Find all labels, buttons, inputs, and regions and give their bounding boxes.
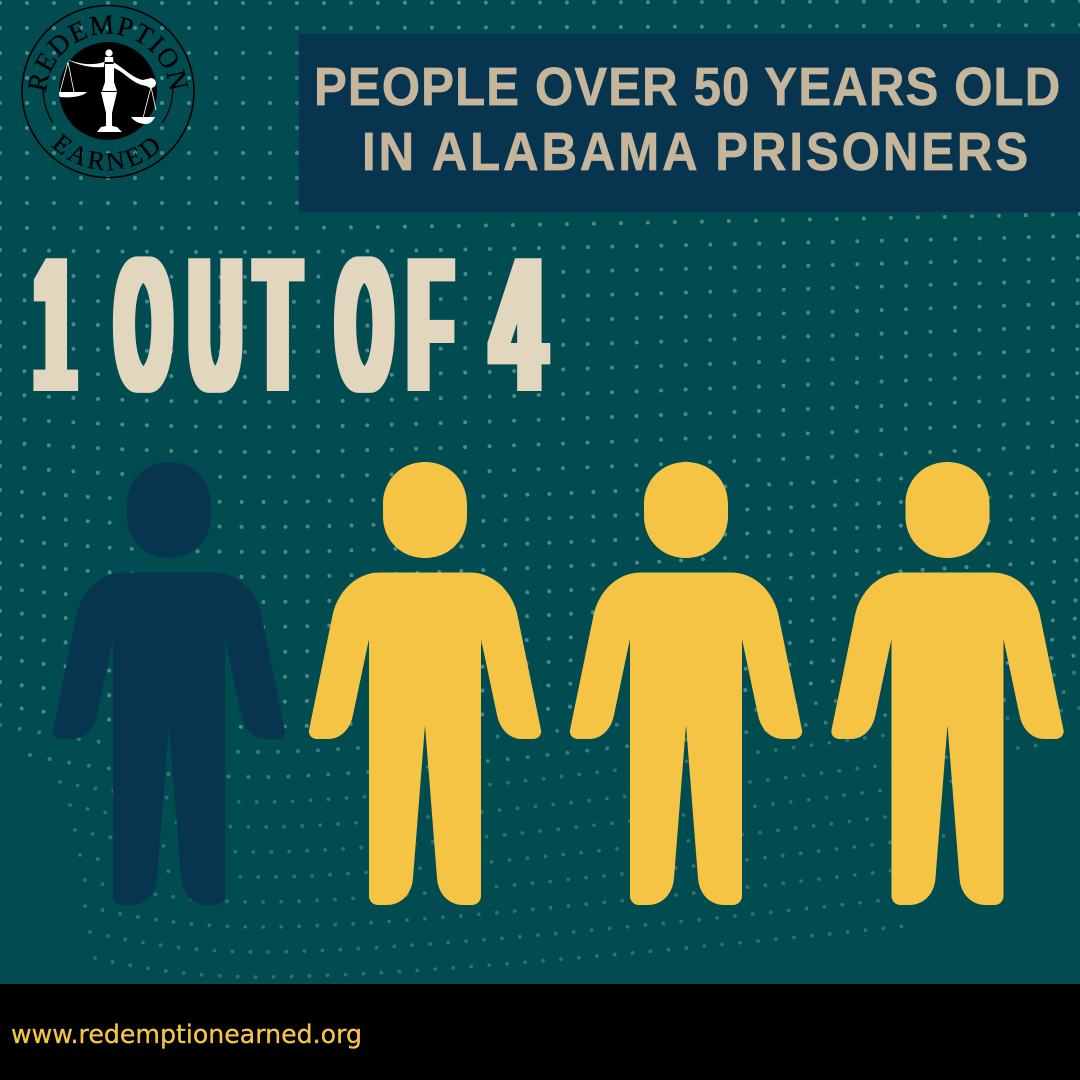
person: highlighted navy xyxy=(53,462,285,905)
pictogram: 1 of 4 people xyxy=(53,462,1064,905)
icon: scales of justice xyxy=(59,49,156,132)
person: yellow 3 xyxy=(831,462,1064,905)
title line 1: PEOPLE OVER 50 YEARS OLD xyxy=(314,56,1060,117)
headline: 1 out of 4: 1 OUT OF xyxy=(35,219,452,431)
person: yellow 1 xyxy=(309,462,541,905)
logo ring text: Earned: EARNED xyxy=(51,133,159,171)
logo side arcs xyxy=(43,87,173,123)
title line 2: IN ALABAMA PRISONERS xyxy=(362,121,1028,182)
person: yellow 2 xyxy=(570,462,802,905)
logo: Redemption Earned seal xyxy=(21,4,195,178)
headline: 1 out of 4: 4 xyxy=(492,218,545,430)
website url: www.redemptionearned.org xyxy=(11,1020,362,1050)
logo ring text: Redemption: REDEMPTION xyxy=(28,15,188,92)
title banner xyxy=(299,34,1080,212)
footer bar xyxy=(0,984,1080,1080)
